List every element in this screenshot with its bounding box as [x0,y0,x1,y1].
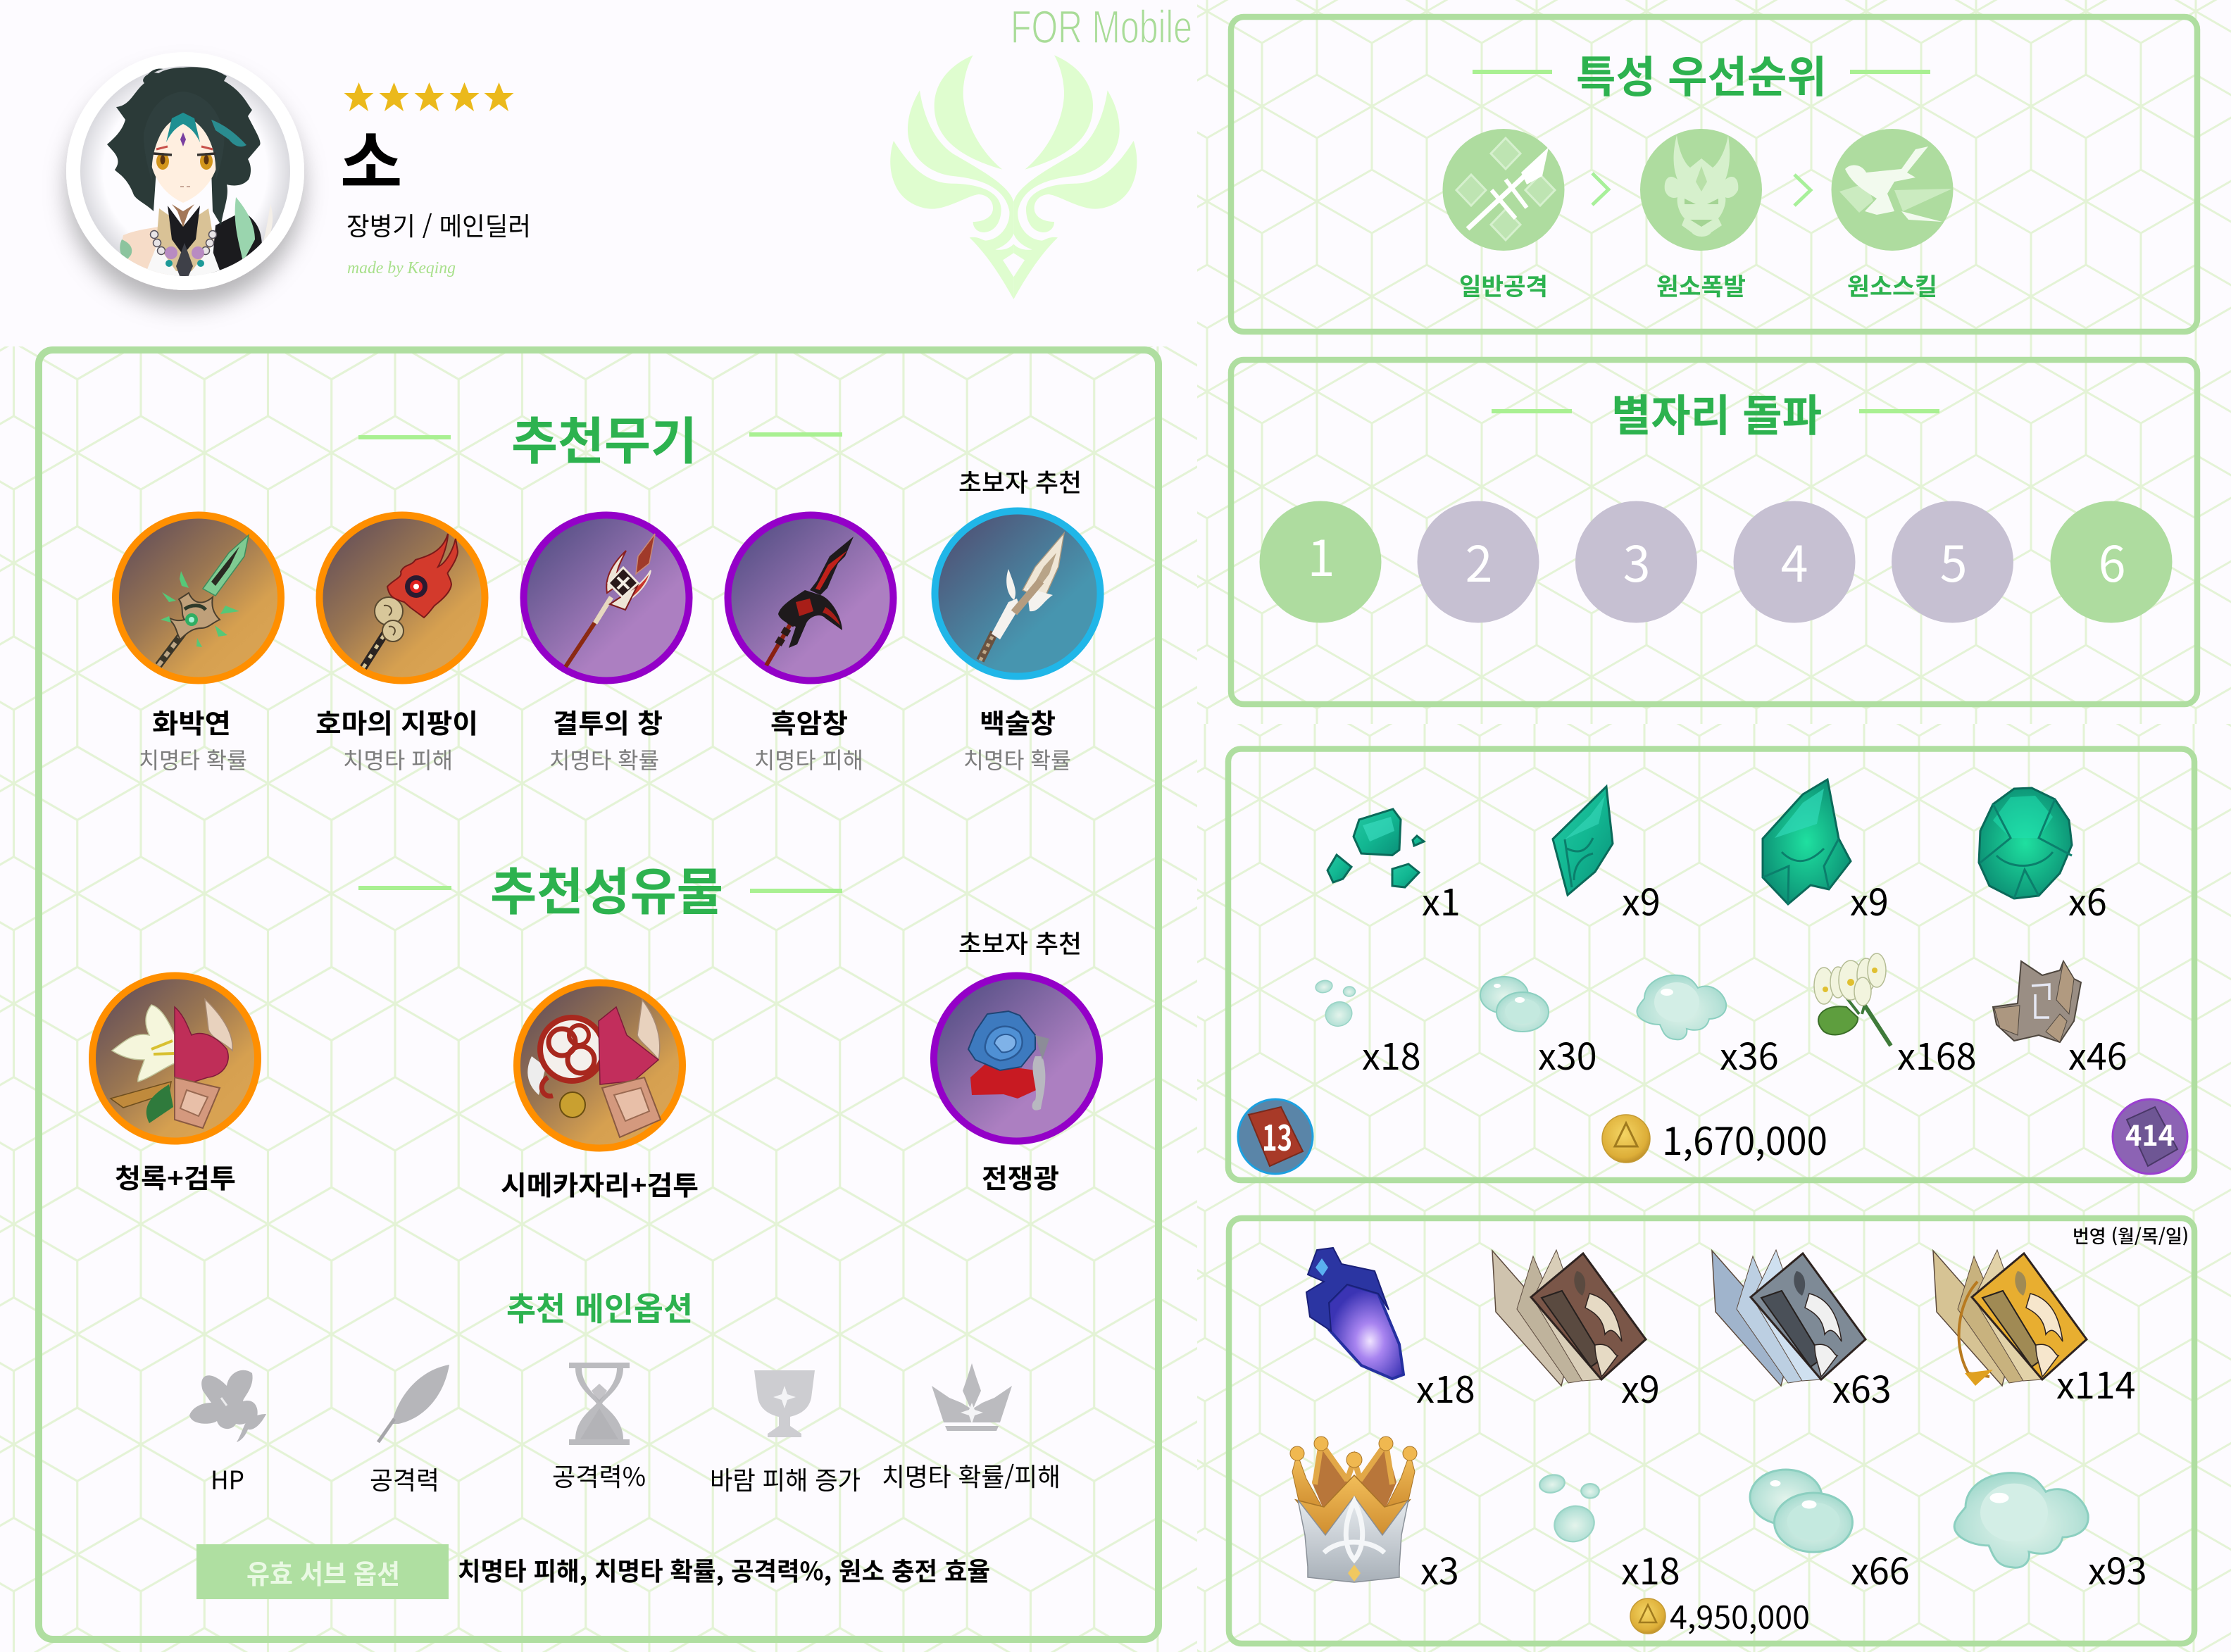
label: beginner recommended: 초보자 추천 [958,463,1082,499]
substat button: 유효 서브 옵션 [246,1553,400,1591]
count: x18 [1621,1542,1680,1595]
main stat: flower HP [189,1370,266,1497]
main stat: goblet anemo [710,1370,861,1497]
talent books count badge [1238,1099,1313,1174]
weapon: 호마의 지팡이 [315,515,485,775]
panel: ascension materials [1228,749,2194,1180]
material: crown of insight [1290,1437,1459,1595]
stat label: 공격력% [552,1457,646,1494]
constellation 5 [1892,501,2013,622]
arrow [1794,175,1811,206]
character portrait [66,52,304,290]
count: x168 [1897,1027,1976,1080]
count: x3 [1420,1542,1459,1595]
panel: talent materials [1229,1218,2194,1644]
constellation 6 [2051,501,2172,622]
artifact name: 청록+검투 [115,1157,236,1196]
constellation 6: 6 [2099,525,2125,596]
constellation 4 [1734,501,1855,622]
weapon name: 백술창 [980,702,1056,741]
weapon type and role: 장병기 / 메인딜러 [346,206,531,243]
weapon: 결투의 창 [524,515,689,775]
stat label: HP [211,1460,244,1497]
stat label: 치명타 확률/피해 [882,1457,1061,1494]
material: guide book [1712,1250,1892,1413]
count: x30 [1538,1027,1597,1080]
count: x46 [2068,1027,2127,1080]
substat button [196,1544,449,1599]
mora total: 4,950,000 [1670,1592,1810,1638]
heading: constellation: 별자리 돌파 [1611,380,1822,444]
weapon name: 결투의 창 [553,702,663,741]
author credit: made by Keqing [347,259,456,277]
material: chunk [1763,780,1889,926]
mobile note: FOR Mobile [1011,1,1192,53]
talent label: 원소스킬 [1847,268,1937,302]
artifact: 청록+검투 [92,976,258,1196]
stat label: 바람 피해 증가 [710,1460,861,1497]
count: x6 [2068,873,2107,926]
count: x9 [1622,873,1661,926]
material: gemstone [1979,788,2107,926]
weapon name: 호마의 지팡이 [315,702,478,741]
mora total: 1,670,000 [1662,1110,1827,1166]
heading: recommended artifacts: 추천성유물 [490,851,723,925]
weapon name: 화박연 [152,702,231,741]
material: slime concentrate [1954,1473,2147,1595]
material: philosophies book [1933,1250,2135,1409]
panel: constellation [1231,360,2197,704]
heading: recommended weapons: 추천무기 [511,400,697,474]
label: beginner recommended: 초보자 추천 [958,925,1082,960]
main stat: sands ATK% [552,1363,646,1494]
panel: recommended weapons and artifacts [39,350,1158,1639]
talent label: 일반공격 [1459,268,1548,302]
subheading: recommended main options: 추천 메인옵션 [506,1284,693,1330]
count: x36 [1720,1027,1779,1080]
emblem: anemo [890,55,1137,299]
constellation 1 [1259,501,1382,622]
material: fragment [1553,787,1661,926]
count: x9 [1850,873,1889,926]
panel: talent priority [1231,17,2197,332]
weapon stat: 치명타 확률 [549,743,659,775]
material: slime condensate [1314,979,1421,1080]
count: x93 [2088,1542,2147,1595]
count: x63 [1832,1360,1892,1413]
material: slime secretions [1480,977,1597,1080]
character header [66,52,531,290]
character name: 소 [340,108,402,206]
main stat: plume ATK [370,1365,449,1497]
count: x66 [1851,1542,1910,1595]
talent: normal attack [1442,129,1565,302]
weapon stat: 치명타 피해 [343,743,453,775]
arrow [1592,173,1608,205]
artifact: 시메카자리+검투 [501,983,699,1203]
artifact: 전쟁광 [934,976,1099,1196]
material: slime secretions [1750,1470,1910,1595]
weapon stat: 치명타 확률 [963,743,1071,775]
exp books count badge [2113,1099,2187,1174]
material: slime condensate [1538,1472,1680,1595]
material: qingxin flower [1814,953,1976,1080]
substat list: 치명타 피해, 치명타 확률, 공격력%, 원소 충전 효율 [458,1551,990,1588]
material: sliver [1327,809,1461,926]
weapon: 백술창 [935,511,1100,775]
material: slime concentrate [1637,975,1779,1080]
talent label: 원소폭발 [1656,268,1746,302]
artifact name: 시메카자리+검투 [501,1164,699,1203]
material: boss drop vial [1306,1248,1475,1413]
constellation 5: 5 [1940,525,1967,596]
count: x114 [2056,1356,2135,1409]
material: stone ward [1993,961,2127,1080]
material: teachings book [1492,1250,1660,1413]
main stat: circlet crit [882,1363,1061,1494]
count: x18 [1362,1027,1421,1080]
talent: elemental burst [1640,129,1762,302]
artifact name: 전쟁광 [982,1157,1059,1196]
count: x9 [1621,1360,1660,1413]
weapon stat: 치명타 피해 [754,743,863,775]
count: x18 [1416,1360,1475,1413]
talent: elemental skill [1831,129,1954,302]
weapon: 화박연 [115,515,281,775]
exp books count badge: 414 [2125,1113,2175,1154]
constellation 2: 2 [1466,525,1492,596]
constellation 1: 1 [1308,520,1335,591]
weapon name: 흑암창 [770,702,848,741]
constellation 3 [1575,501,1697,622]
constellation 4: 4 [1781,525,1808,596]
note: farm days: 번영 (월/목/일) [2073,1222,2189,1249]
constellation 3: 3 [1623,525,1650,596]
count: x1 [1422,873,1461,926]
talent books count badge: 13 [1262,1110,1292,1161]
constellation 2 [1417,501,1539,622]
heading: talent priority: 특성 우선순위 [1576,42,1827,105]
stat label: 공격력 [370,1460,439,1497]
weapon: 흑암창 [728,515,893,775]
weapon stat: 치명타 확률 [139,743,247,775]
star rating [344,82,514,111]
